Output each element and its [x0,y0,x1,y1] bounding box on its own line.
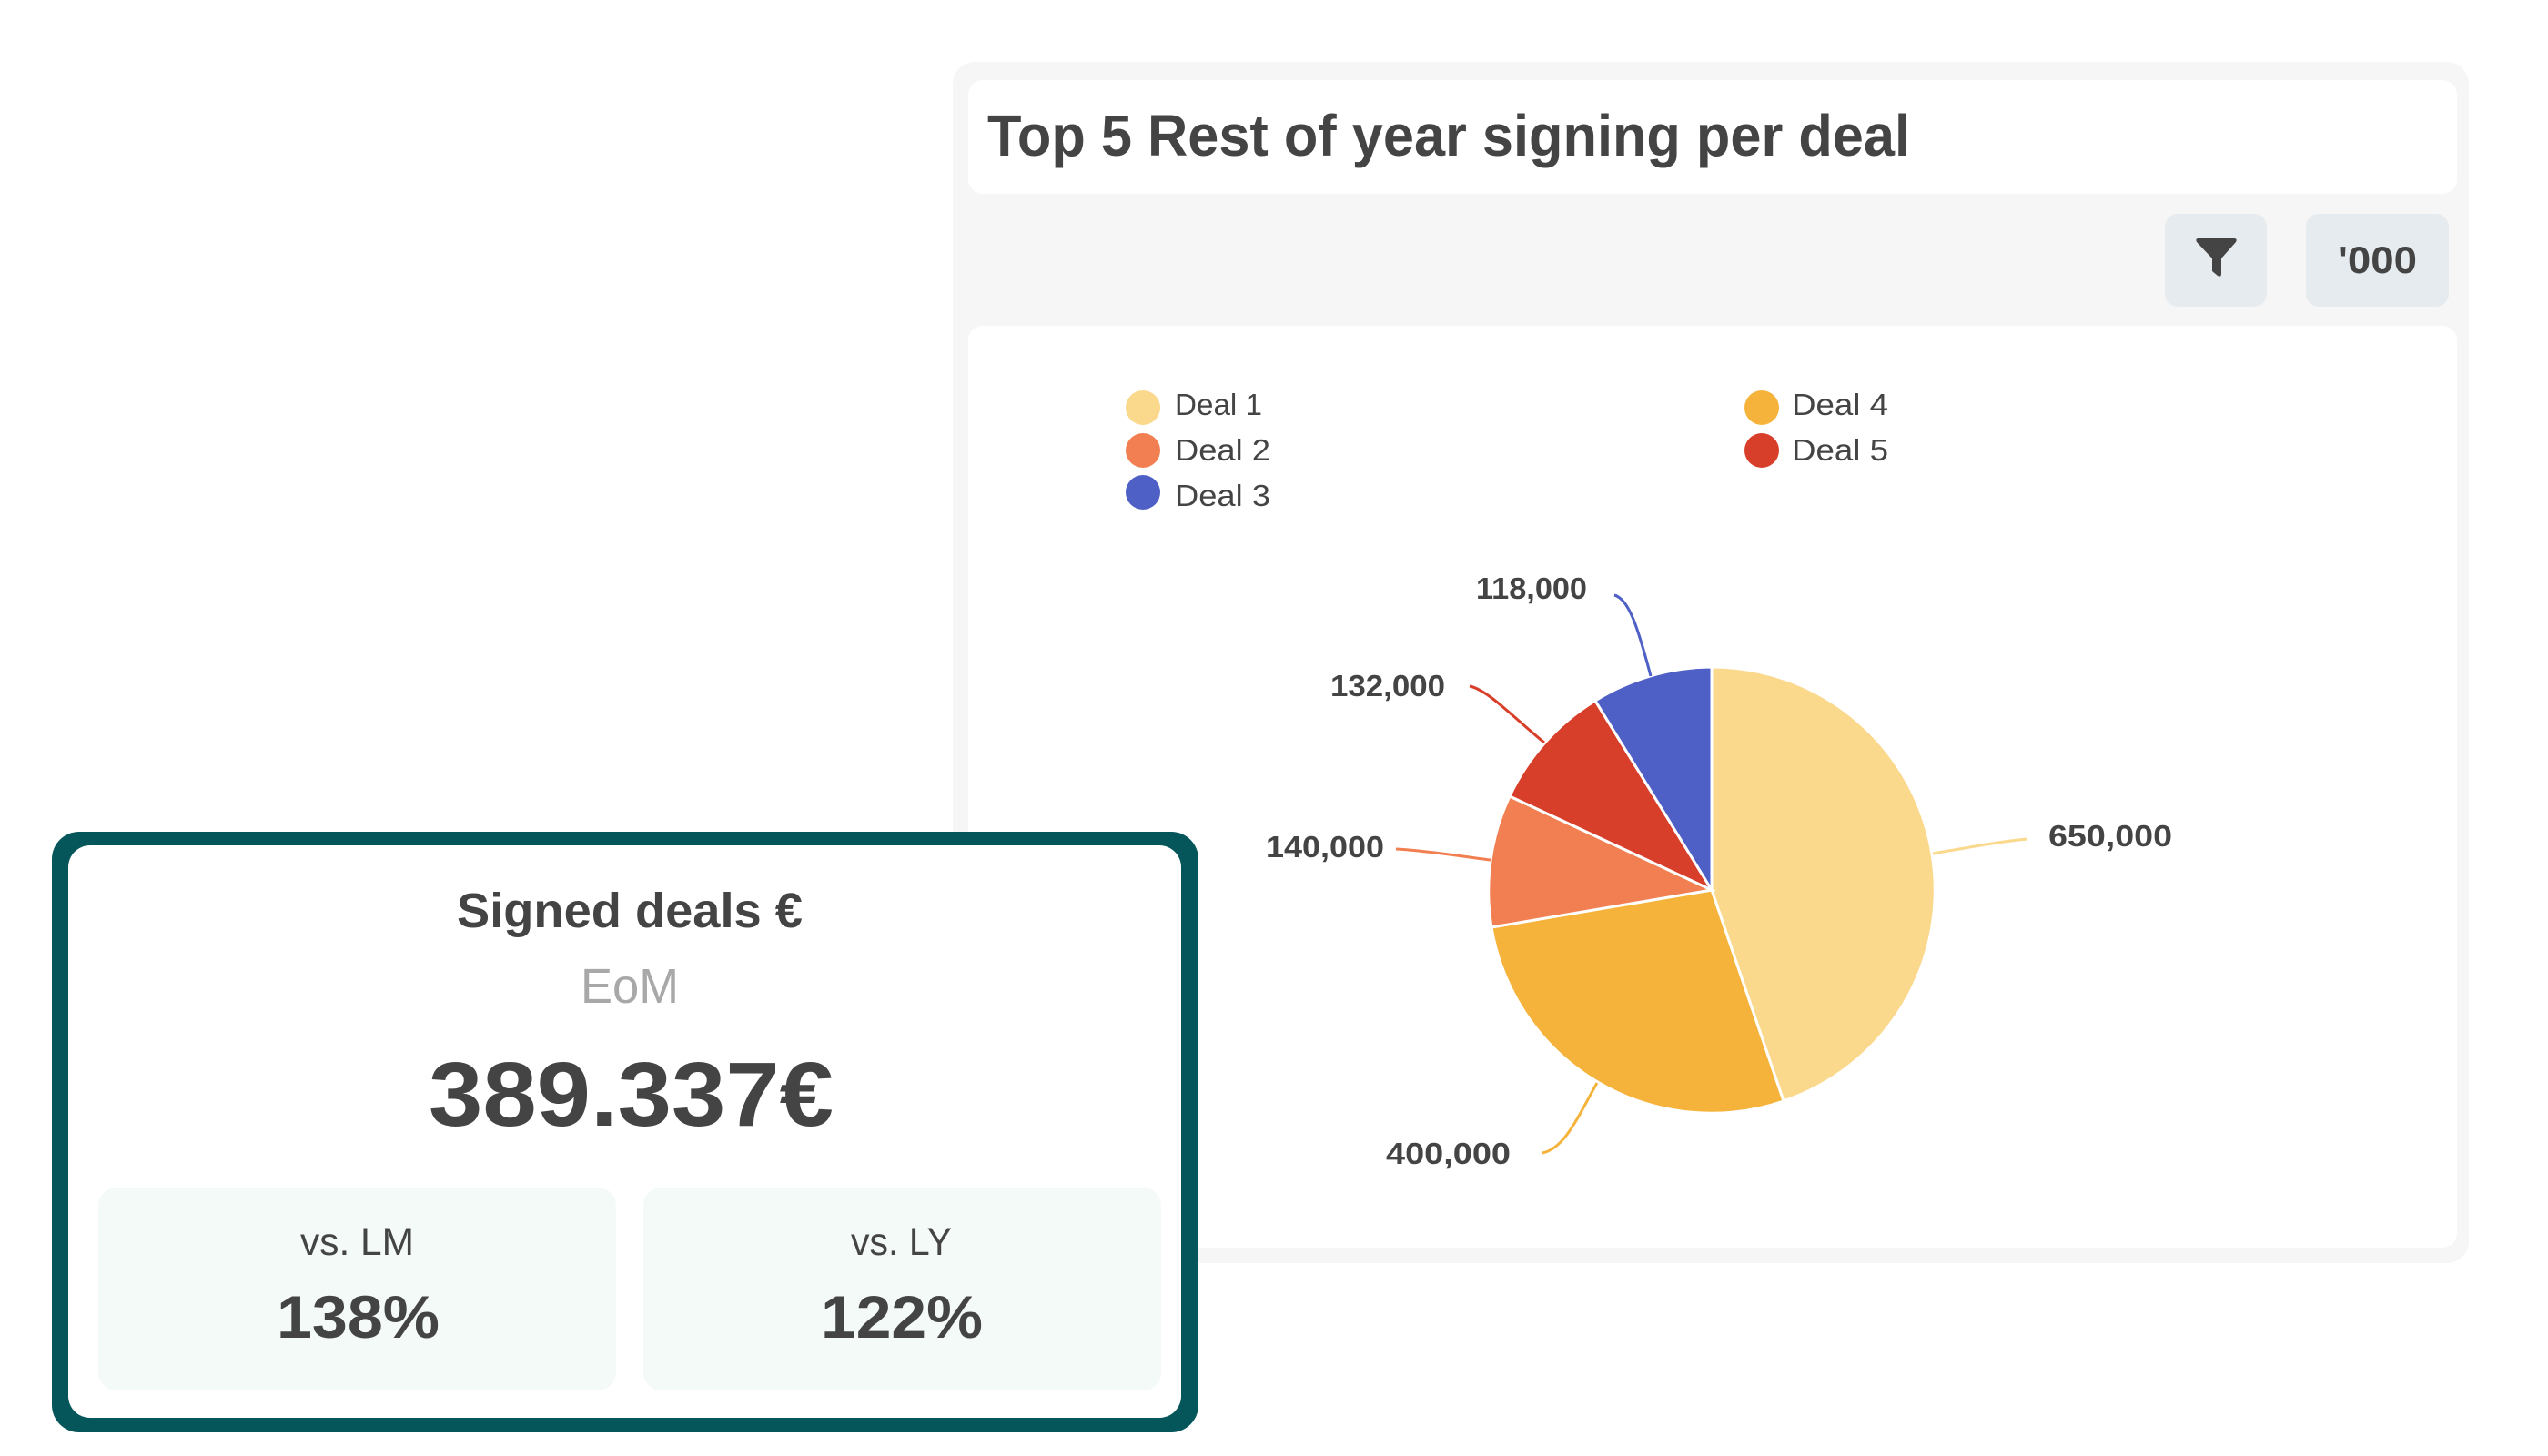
leader line: 400,000 [1542,1083,1597,1153]
units button [2306,214,2449,307]
slice: deal 5 [1510,701,1712,890]
filter button [2165,214,2267,307]
value label: 650,000: 650,000 [2048,819,2172,853]
legend: deal 1: Deal 1 [1175,388,1262,421]
panel: top 5 rest of year signing [953,62,2469,1263]
comparison: vs. LM: 138% [277,1283,440,1350]
slice: deal 3 [1595,667,1712,890]
comparison: vs. LY [643,1188,1161,1390]
KPI heading: Signed deals € [457,884,803,938]
pie chart [1489,667,1935,1113]
legend: deal 3 [1126,475,1270,512]
value label: 140,000: 140,000 [1266,830,1384,864]
value label: 132,000: 132,000 [1330,669,1445,703]
comparison: vs. LM [98,1188,616,1390]
legend: deal 5 [1744,433,1888,468]
chart card [968,326,2457,1248]
slice: deal 4 [1491,890,1784,1113]
leader line: 132,000 [1470,686,1544,743]
legend: deal 4: Deal 4 [1792,388,1888,421]
legend: deal 2 [1126,433,1270,468]
leader line: 140,000 [1396,849,1491,860]
comparison: vs. LM: vs. LM [300,1220,414,1264]
leader line: 118,000 [1614,595,1651,676]
slice: deal 2 [1489,796,1712,927]
KPI value: 389.337€ [429,1044,834,1146]
leader line: 650,000 [1933,839,2027,854]
value label: 118,000: 118,000 [1476,571,1587,605]
legend: deal 3: Deal 3 [1175,479,1270,512]
units button: '000 [2338,238,2417,281]
comparison: vs. LY: 122% [821,1283,983,1350]
title card: Top 5 Rest of year signing per deal [987,103,1910,168]
value label: 400,000: 400,000 [1386,1137,1511,1170]
legend: deal 5: Deal 5 [1792,433,1888,467]
KPI period: EoM [581,959,679,1014]
legend: deal 1 [1126,388,1262,425]
panel: signed deals KPI card [52,832,1198,1432]
comparison: vs. LY: vs. LY [851,1220,952,1264]
title card [968,80,2457,194]
legend [1126,388,1888,512]
legend: deal 2: Deal 2 [1175,433,1270,467]
legend: deal 4 [1744,388,1888,425]
slice: deal 1 [1712,667,1935,1101]
